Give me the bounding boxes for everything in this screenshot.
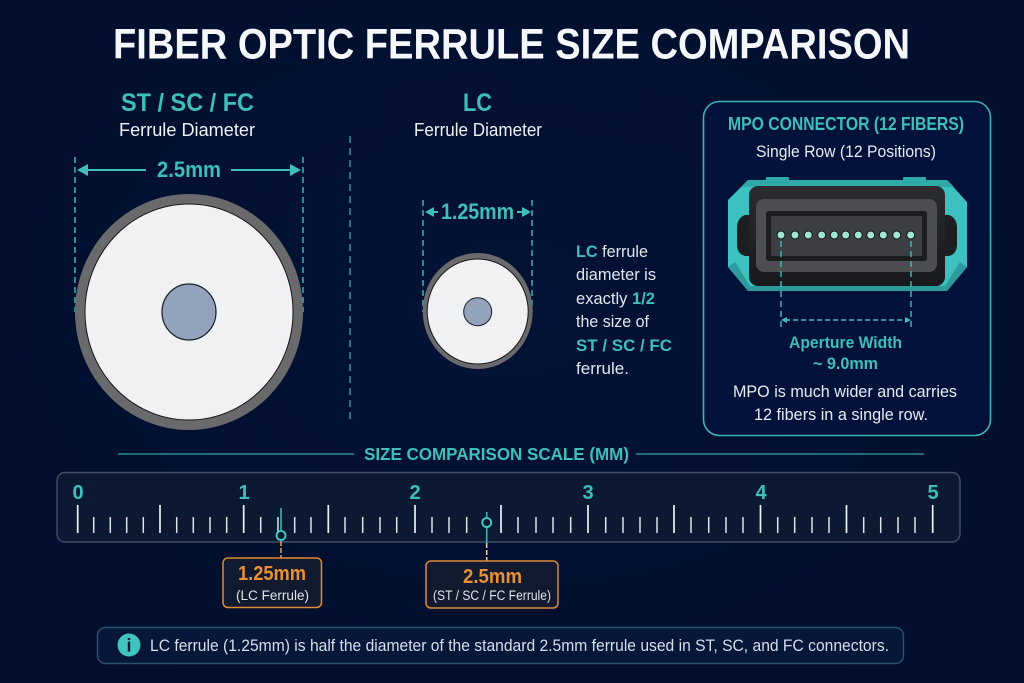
ruler numbers: 1 [238, 482, 250, 504]
dimension: 1.25mm [423, 199, 532, 312]
subheading: ferrule diameter: Ferrule Diameter [119, 120, 255, 140]
text: MPO description: 12 fibers in a single row. [754, 405, 928, 424]
note text: LC ferrule (1.25mm) is half the diameter of the standard 2.5mm ferrule used in ST, SC, and FC connectors. [150, 637, 889, 655]
text: LC half-size note: the size of [576, 312, 649, 331]
text: MPO description: MPO is much wider and carries [733, 382, 957, 401]
dimension: 2.5mm [75, 157, 303, 312]
dimension: aperture width [781, 241, 911, 373]
panel: MPO connector [704, 102, 990, 436]
callout: 2.5mm ST / SC / FC ferrule: 2.5mm [463, 566, 522, 588]
icon: small ferrule cross-section [423, 253, 533, 369]
callout: 2.5mm ST / SC / FC ferrule [426, 561, 558, 608]
dimension: aperture width: ~ 9.0mm [813, 354, 878, 373]
ruler numbers [72, 482, 939, 504]
callout: 1.25mm LC ferrule: (LC Ferrule) [236, 588, 309, 603]
text: LC half-size note: exactly 1/2 [576, 289, 655, 308]
note bar [98, 628, 904, 664]
fiber dots [777, 231, 915, 239]
ruler numbers: 5 [927, 482, 939, 504]
dimension: 1.25mm: 1.25mm [441, 199, 514, 224]
dimension: aperture width: Aperture Width [789, 333, 902, 352]
text: MPO description [733, 382, 957, 424]
marker: 2.5mm [482, 512, 491, 561]
ruler numbers: 0 [72, 482, 84, 504]
text: LC half-size note: LC ferrule [576, 242, 648, 261]
ruler numbers: 3 [582, 482, 594, 504]
text: LC half-size note [576, 242, 672, 378]
subheading: ferrule diameter: Ferrule Diameter [414, 120, 542, 140]
title: FIBER OPTIC FERRULE SIZE COMPARISON [113, 20, 910, 68]
heading: ST / SC / FC: ST / SC / FC [121, 89, 254, 117]
icon: info [118, 634, 140, 656]
major ticks [78, 505, 933, 533]
divider line [349, 136, 351, 424]
heading: size comparison scale: SIZE COMPARISON SCALE (MM) [364, 444, 629, 464]
ruler numbers: 4 [755, 482, 767, 504]
icon: MPO connector [728, 177, 967, 291]
heading: LC: LC [463, 89, 492, 117]
minor ticks [94, 517, 915, 533]
text: LC half-size note: diameter is [576, 265, 656, 284]
heading: MPO connector: MPO CONNECTOR (12 FIBERS) [728, 114, 964, 134]
text: LC half-size note: ST / SC / FC [576, 336, 672, 355]
text: LC half-size note: ferrule. [576, 359, 629, 378]
ruler numbers: 2 [409, 482, 421, 504]
marker: 1.25mm [276, 508, 286, 558]
icon: info: i [126, 636, 132, 656]
ruler [57, 472, 960, 542]
callout: 1.25mm LC ferrule [223, 558, 322, 608]
subheading: single row: Single Row (12 Positions) [756, 143, 936, 161]
callout: 2.5mm ST / SC / FC ferrule: (ST / SC / FC Ferrule) [433, 588, 551, 603]
callout: 1.25mm LC ferrule: 1.25mm [238, 563, 306, 585]
icon: large ferrule cross-section [75, 194, 303, 430]
panel: ST / SC / FC ferrule [75, 89, 303, 430]
panel: LC ferrule [414, 89, 672, 378]
dimension: 2.5mm: 2.5mm [157, 157, 221, 182]
